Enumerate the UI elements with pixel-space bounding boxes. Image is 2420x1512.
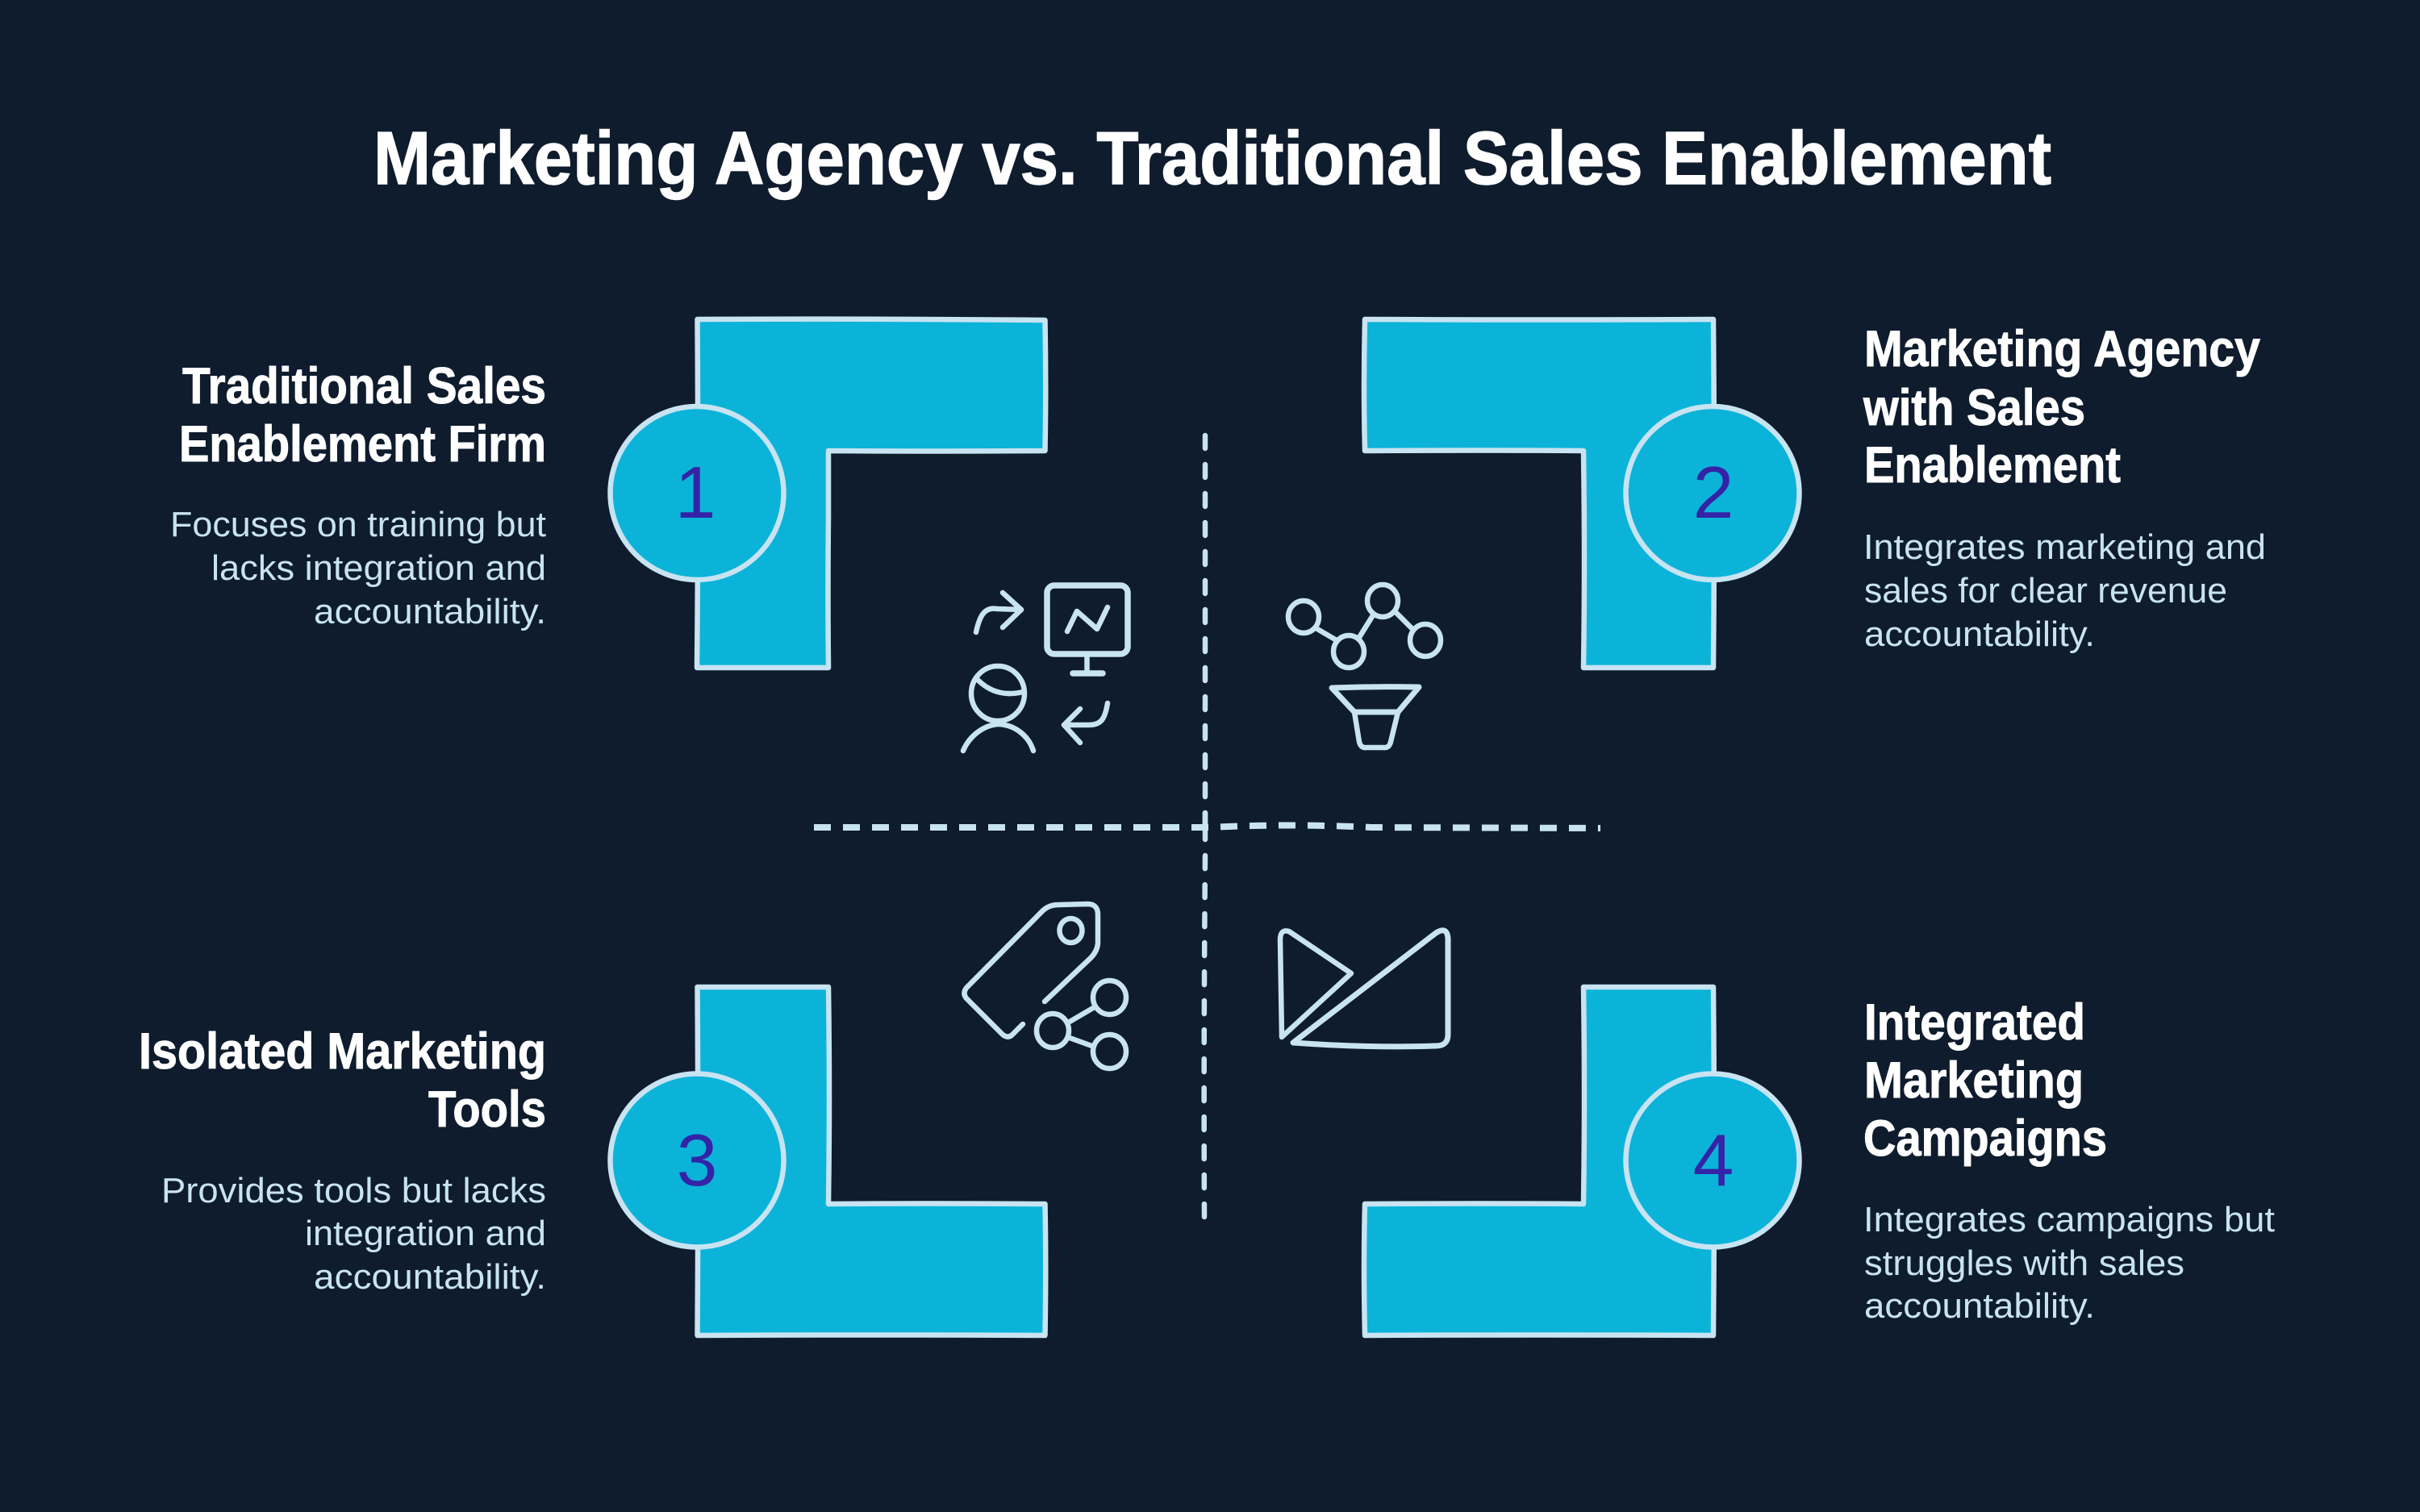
vertical dashed divider xyxy=(1204,435,1205,1218)
panel: quadrant 4 shape xyxy=(1364,987,1799,1335)
description 4: Integrates campaigns but xyxy=(1863,1200,2275,1239)
heading 4: Campaigns xyxy=(1863,1110,2107,1167)
heading 3: Tools xyxy=(428,1081,546,1138)
icon: network graph xyxy=(1288,585,1441,668)
description 1: lacks integration and xyxy=(211,548,546,588)
text block: Traditional Sales Enablement Firm xyxy=(170,358,546,631)
badge 3 xyxy=(610,1074,784,1247)
icon: price tag with share nodes xyxy=(965,904,1126,1068)
description 2 xyxy=(1863,527,2266,654)
icon: presentation training xyxy=(963,585,1128,751)
icon: arrow to monitor xyxy=(976,593,1021,632)
badge 1: 1 xyxy=(675,452,716,534)
icon: price tag xyxy=(965,904,1098,1037)
description 4: struggles with sales xyxy=(1864,1243,2184,1283)
heading 2: Enablement xyxy=(1864,437,2121,494)
text block: Isolated Marketing Tools xyxy=(139,1023,546,1297)
heading 2: with Sales xyxy=(1863,380,2085,436)
icon: share nodes xyxy=(1037,981,1126,1068)
description 1: Focuses on training but xyxy=(170,505,546,544)
badge 3: 3 xyxy=(677,1120,717,1202)
title: Marketing Agency vs. Traditional Sales Enablement xyxy=(373,116,2051,200)
description 3: accountability. xyxy=(314,1257,546,1297)
badge 1 xyxy=(610,406,784,580)
badge 4: 4 xyxy=(1693,1120,1734,1202)
heading 3: Isolated Marketing xyxy=(139,1023,546,1080)
description 3: Provides tools but lacks xyxy=(161,1171,546,1210)
heading 3 xyxy=(139,1023,546,1138)
description 3: integration and xyxy=(305,1214,546,1253)
description 2: sales for clear revenue xyxy=(1864,571,2227,610)
description 4 xyxy=(1863,1200,2275,1326)
heading 2: Marketing Agency xyxy=(1864,321,2260,377)
heading 2 xyxy=(1863,321,2260,494)
icon: network and funnel xyxy=(1288,585,1441,748)
description 1 xyxy=(170,505,546,631)
text block: Integrated Marketing Campaigns xyxy=(1863,994,2275,1326)
heading 1: Enablement Firm xyxy=(179,416,546,473)
badge 2: 2 xyxy=(1693,452,1734,534)
panel: quadrant 1 shape xyxy=(610,319,1045,668)
heading 4 xyxy=(1863,994,2107,1167)
description 4: accountability. xyxy=(1864,1286,2095,1326)
heading 1: Traditional Sales xyxy=(182,358,546,414)
heading 1 xyxy=(179,358,546,473)
horizontal dashed divider xyxy=(814,826,1600,828)
icon: person xyxy=(963,666,1033,751)
panel: quadrant 3 shape xyxy=(610,987,1045,1335)
badge 4 xyxy=(1626,1074,1799,1247)
icon: right triangle xyxy=(1293,931,1448,1047)
description 2: Integrates marketing and xyxy=(1863,527,2266,567)
icon: left triangle xyxy=(1280,931,1351,1037)
description 3 xyxy=(161,1171,546,1297)
heading 4: Integrated xyxy=(1864,994,2085,1051)
text block: Marketing Agency with Sales Enablement xyxy=(1863,321,2266,654)
description 1: accountability. xyxy=(314,592,546,631)
panel: quadrant 2 shape xyxy=(1364,319,1799,668)
icon: arrow to person xyxy=(1064,703,1108,743)
description 2: accountability. xyxy=(1864,614,2095,654)
icon: split triangles xyxy=(1280,931,1448,1047)
badge 2 xyxy=(1626,406,1799,580)
icon: funnel xyxy=(1332,687,1419,748)
icon: monitor with chart xyxy=(1047,585,1128,673)
heading 4: Marketing xyxy=(1864,1052,2084,1109)
